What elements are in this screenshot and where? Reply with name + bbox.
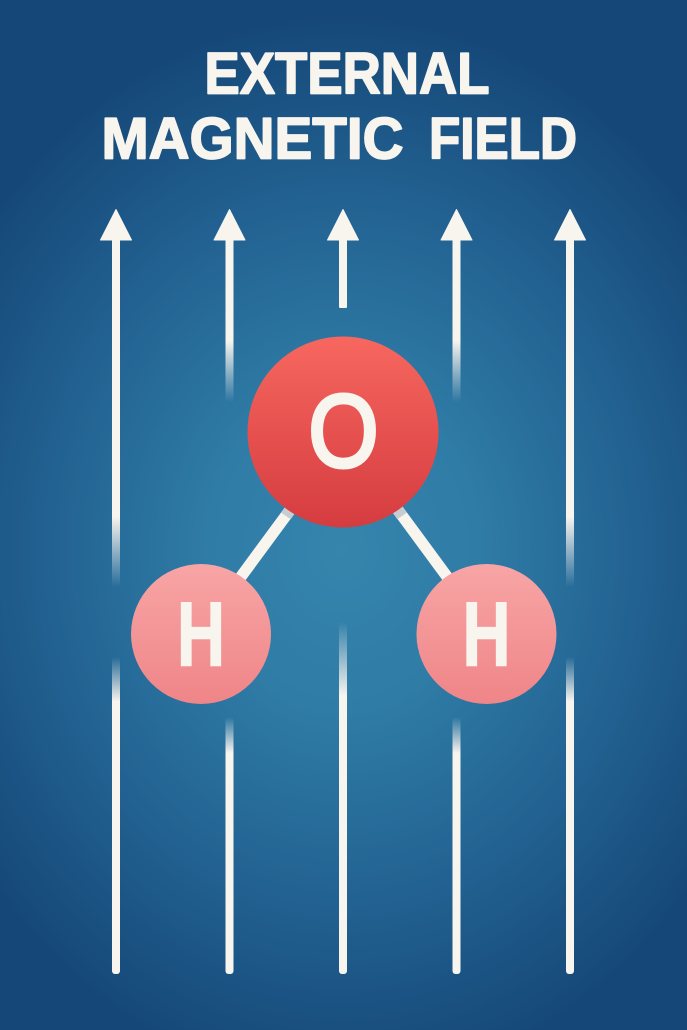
title: MAGNETIC: [102, 106, 404, 172]
atom: oxygen: O: [308, 374, 378, 488]
bond: right: [395, 506, 448, 578]
arrow: field line 4: [441, 210, 472, 974]
atom: oxygen: [248, 336, 438, 528]
atom: left hydrogen: [131, 564, 271, 704]
atom: right hydrogen: [416, 564, 556, 704]
water molecule: [131, 336, 556, 704]
title: FIELD: [429, 106, 577, 172]
arrow: field line 2: [214, 210, 245, 974]
arrow: field line 1: [100, 210, 132, 974]
title: [102, 42, 577, 172]
bond: left: [240, 506, 293, 578]
atom: left hydrogen: H: [177, 584, 225, 686]
title: EXTERNAL: [204, 42, 490, 106]
arrow: field line 3: [328, 210, 358, 974]
arrow: field line 5: [554, 210, 586, 974]
atom: right hydrogen: H: [462, 584, 510, 686]
